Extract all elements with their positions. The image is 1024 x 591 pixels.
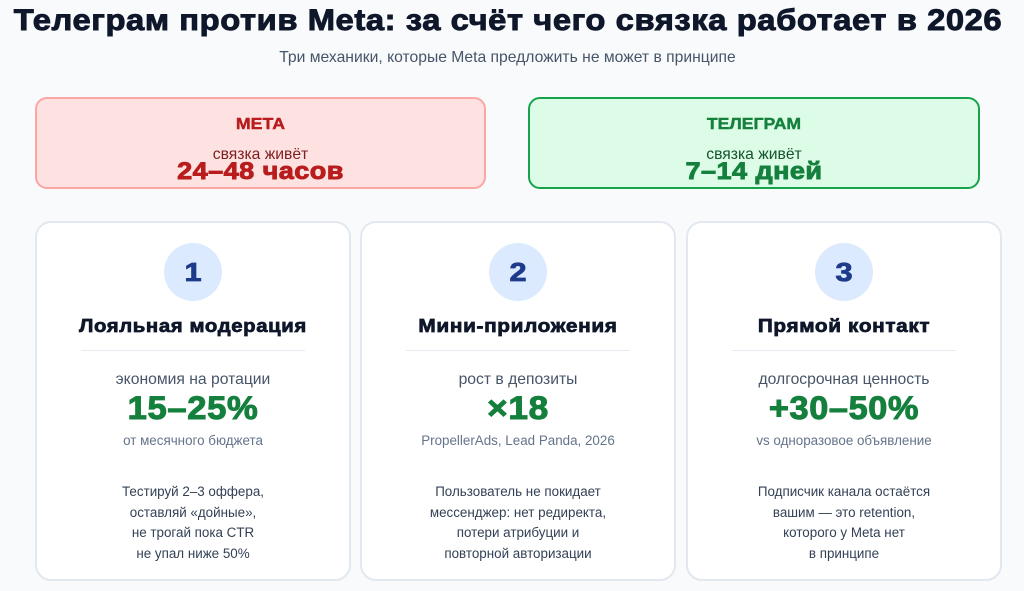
card 1 label: экономия на ротации <box>116 371 270 388</box>
number badge 2: 2 <box>509 257 527 287</box>
card 1 text: не трогай пока CTR <box>132 525 254 540</box>
card 2 text: Пользователь не покидает <box>435 484 601 499</box>
number badge 1 <box>164 243 222 301</box>
card 1 text: оставляй «дойные», <box>130 505 256 520</box>
meta value: 24–48 часов <box>177 158 344 185</box>
card 3 text <box>758 484 930 561</box>
card 1 text <box>122 484 264 561</box>
card 3 text: которого у Meta нет <box>783 525 905 540</box>
card 2 note: PropellerAds, Lead Panda, 2026 <box>421 433 615 448</box>
panel: meta <box>35 97 486 189</box>
card 3 label: долгосрочная ценность <box>759 371 929 388</box>
panel: card 2 <box>360 221 676 581</box>
card 1 text: Тестируй 2–3 оффера, <box>122 484 264 499</box>
card 3 text: в принципе <box>809 546 879 561</box>
panel: card 3 <box>686 221 1002 581</box>
number badge 1: 1 <box>184 257 202 287</box>
card 1 heading: Лояльная модерация <box>79 316 307 336</box>
card 1 value: 15–25% <box>128 390 258 426</box>
panel: telegram <box>528 97 980 189</box>
card 2 value: ×18 <box>487 390 549 426</box>
card 3 value: +30–50% <box>769 390 919 426</box>
meta heading: МЕТА <box>236 116 285 133</box>
number badge 3: 3 <box>835 257 853 287</box>
card 3 note: vs одноразовое объявление <box>756 433 932 448</box>
telegram heading: ТЕЛЕГРАМ <box>707 116 801 133</box>
card 3 text: Подписчик канала остаётся <box>758 484 930 499</box>
card 2 text <box>430 484 606 561</box>
meta label: связка живёт <box>213 146 308 163</box>
telegram label: связка живёт <box>706 146 802 163</box>
card 2 heading: Мини-приложения <box>418 316 618 336</box>
card 2 text: повторной авторизации <box>444 546 592 561</box>
card 2 label: рост в депозиты <box>459 371 577 388</box>
number badge 2 <box>489 243 547 301</box>
card 3 heading: Прямой контакт <box>758 316 930 336</box>
card 2 text: потери атрибуции и <box>457 525 579 540</box>
card 2 text: мессенджер: нет редиректа, <box>430 505 606 520</box>
title: Телеграм против Meta: за счёт чего связка работает в 2026 <box>14 4 1002 37</box>
card 1 text: не упал ниже 50% <box>136 546 250 561</box>
number badge 3 <box>815 243 873 301</box>
card 3 text: вашим — это retention, <box>773 505 915 520</box>
subtitle: Три механики, которые Meta предложить не может в принципе <box>279 49 736 66</box>
card 1 note: от месячного бюджета <box>123 433 263 448</box>
telegram value: 7–14 дней <box>686 158 822 185</box>
panel: card 1 <box>35 221 351 581</box>
